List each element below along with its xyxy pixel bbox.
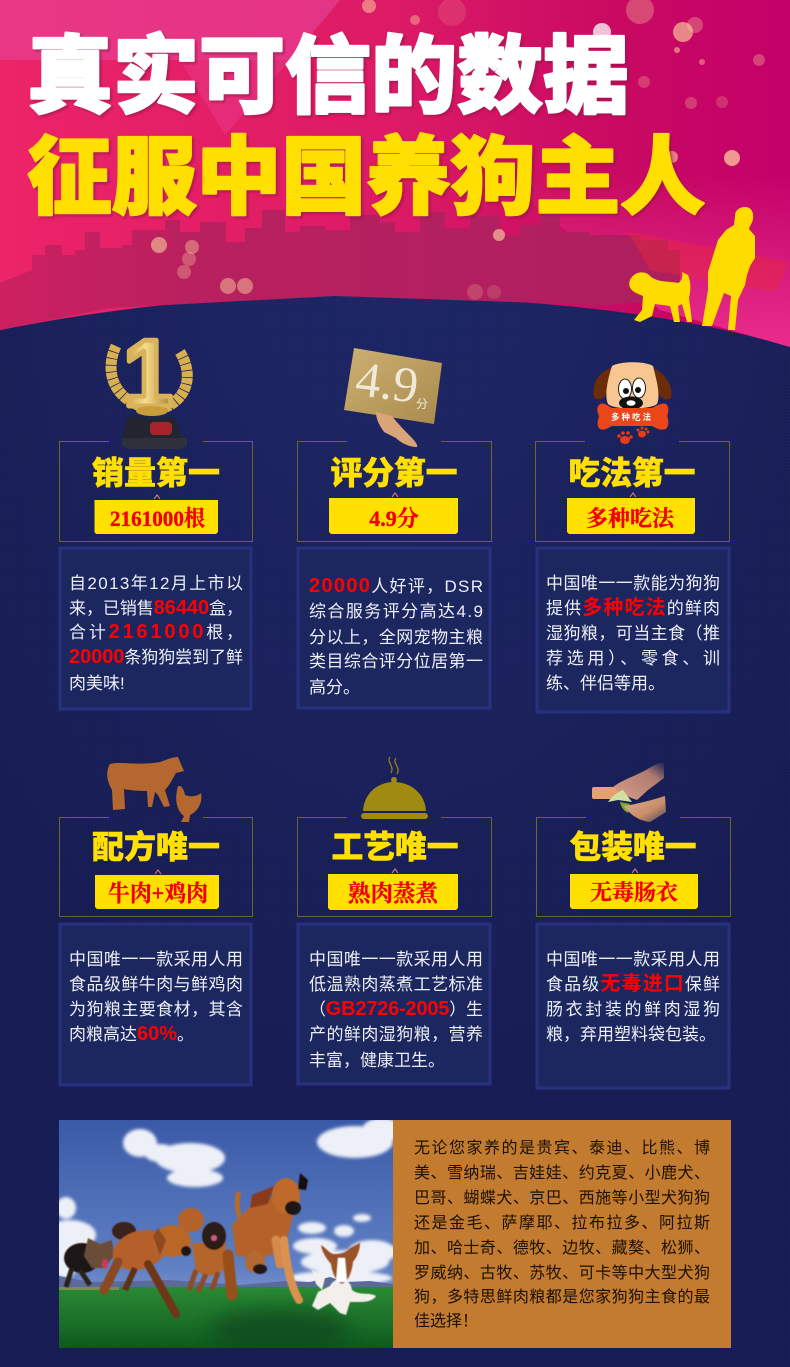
value badge: 多种吃法: [586, 506, 676, 531]
value badge: [328, 869, 458, 910]
black-faced mastiff: [189, 1222, 226, 1292]
description card: [298, 548, 490, 708]
heading: 吃法第一: [568, 455, 696, 491]
description card: 肉粮高达60%。: [69, 1023, 194, 1045]
formula header frame: [60, 818, 252, 916]
value badge: 4.9分: [369, 506, 419, 531]
heading: 配方唯一: [92, 829, 220, 865]
description card: 中国唯一一款采用人用: [309, 950, 483, 969]
heading: 工艺唯一: [332, 829, 458, 865]
panel: breeds text: 巴哥、蝴蝶犬、京巴、西施等小型犬狗狗: [414, 1189, 710, 1207]
panel: breeds text: 罗威纳、古牧、苏牧、可卡等中大型犬狗: [414, 1264, 710, 1282]
methods header frame: [536, 442, 730, 542]
icon: steaming food cloche: [361, 757, 428, 819]
header banner: [0, 0, 790, 347]
description card: 丰富，健康卫生。: [309, 1051, 445, 1070]
panel: eating methods first: [536, 362, 730, 712]
packaging header frame: [536, 818, 730, 916]
panel: breeds text: 无论您家养的是贵宾、泰迪、比熊、博: [414, 1139, 710, 1157]
panel: packaging unique: [536, 762, 730, 1088]
icon: cow and chicken: [107, 757, 201, 822]
description card: 荐选用）、零食、训: [546, 649, 720, 668]
icon: 4.9 score sign with hand: 分: [416, 397, 428, 411]
value badge: 无毒肠衣: [590, 880, 678, 905]
description card: 中国唯一一款采用人用: [546, 950, 720, 969]
panel: breeds text: 佳选择！: [414, 1312, 478, 1330]
small distant hound: [245, 1251, 267, 1274]
value badge: [94, 495, 218, 534]
description card: 湿狗粮，可当主食（推: [546, 624, 720, 643]
description card: 20000条狗狗尝到了鲜: [69, 646, 243, 668]
heading: 包装唯一: [570, 829, 696, 865]
description card: 食品级无毒进口保鲜: [546, 972, 720, 995]
description card: [537, 548, 729, 712]
description card: 产的鲜肉湿狗粮，营养: [309, 1025, 483, 1044]
description card: 高分。: [309, 678, 360, 697]
icon: hands holding casing: [592, 762, 666, 822]
icon: gold trophy: 1: [123, 320, 173, 427]
description card: 中国唯一一款采用人用: [69, 950, 243, 969]
description card: 提供多种吃法的鲜肉: [546, 596, 720, 619]
front hound: [104, 1223, 191, 1314]
dogs: [64, 1173, 376, 1315]
value badge: 2161000根: [110, 506, 205, 531]
sales header frame: [60, 442, 252, 542]
mountains: [59, 1276, 393, 1287]
panel: formula unique: [60, 757, 252, 1085]
panel: sales first: [60, 320, 252, 709]
rating header frame: [298, 442, 492, 542]
icon: cartoon dog with bone: [593, 362, 672, 444]
description card: 20000人好评，DSR: [309, 575, 483, 597]
description card: 低温熟肉蒸煮工艺标准: [309, 974, 483, 994]
description card: 来，已销售86440盒，: [69, 597, 243, 619]
bokeh lights: [151, 0, 765, 300]
panel: breeds text: 美、雪纳瑞、吉娃娃、约克夏、小鹿犬、: [414, 1164, 710, 1182]
description card: 练、伴侣等用。: [546, 674, 665, 693]
description card: [60, 548, 251, 709]
description card: 肉美味!: [69, 674, 125, 693]
value badge: [329, 493, 458, 534]
value badge: 熟肉蒸煮: [348, 880, 439, 906]
shepherd dog: [64, 1238, 114, 1290]
leaping hound: [228, 1173, 308, 1300]
red light rays: [628, 232, 790, 292]
description card: 粮，弃用塑料袋包装。: [546, 1025, 716, 1044]
panel: process unique: [298, 757, 492, 1084]
value badge: [567, 493, 695, 534]
description card: 中国唯一一款能为狗狗: [546, 574, 720, 593]
photo: dogs running on grass: [44, 1118, 402, 1352]
icon: cartoon dog with bone: 多种吃法: [611, 412, 653, 422]
description card: [298, 924, 490, 1084]
value badge: 牛肉+鸡肉: [108, 881, 208, 906]
panel: rating first: [298, 348, 492, 708]
description card: 类目综合评分位居第一: [309, 652, 483, 671]
description card: 合计2161000根，: [69, 621, 243, 643]
clouds: [44, 1118, 402, 1285]
terrier: [312, 1243, 376, 1315]
description card: 为狗粮主要食材，其含: [69, 1000, 243, 1019]
back dark dog: [112, 1222, 136, 1240]
description card: 自2013年12月上市以: [69, 574, 243, 593]
panel: breeds text: [393, 1120, 731, 1348]
icon: gold trophy: [111, 320, 187, 449]
icon: 4.9 score sign with hand: 4.9: [353, 350, 422, 414]
panel: breeds text: 狗，多特思鲜肉粮都是您家狗狗主食的最: [414, 1288, 710, 1306]
heading: 评分第一: [330, 455, 458, 491]
icon: 4.9 score sign with hand: [344, 348, 442, 447]
description card: 食品级鲜牛肉与鲜鸡肉: [69, 975, 243, 994]
city silhouette: [0, 210, 680, 330]
title line 2: 征服中国养狗主人: [27, 131, 705, 226]
value badge: [95, 870, 219, 909]
description card: 分以上，全网宠物主粮: [309, 628, 483, 647]
title line 1: 真实可信的数据: [27, 30, 629, 125]
description card: [60, 924, 251, 1085]
heading: 销量第一: [92, 455, 220, 491]
far hound head: [178, 1208, 204, 1232]
description card: 综合服务评分高达4.9: [309, 602, 483, 621]
description card: 肠衣封装的鲜肉湿狗: [546, 1000, 720, 1019]
process header frame: [298, 818, 492, 916]
description card: [537, 924, 729, 1088]
panel: breeds text: 加、哈士奇、德牧、边牧、藏獒、松狮、: [414, 1239, 710, 1257]
description card: （GB2726-2005）生: [309, 998, 483, 1020]
icon: man and dog silhouette: [629, 207, 755, 330]
panel: breeds text: 还是金毛、萨摩耶、拉布拉多、阿拉斯: [414, 1214, 710, 1232]
value badge: [570, 869, 698, 909]
